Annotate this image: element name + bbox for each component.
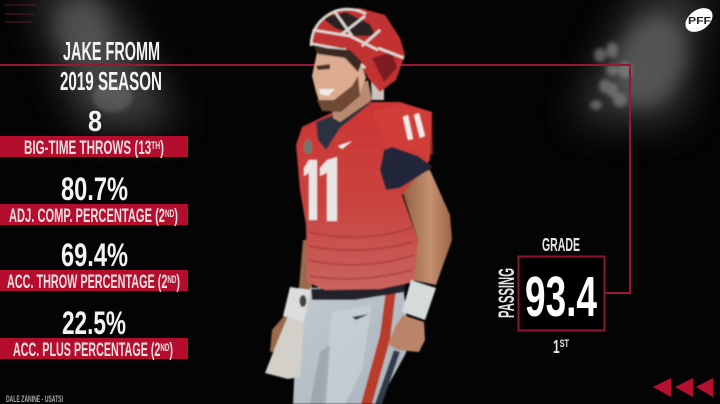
stat: adjusted completion percentage: 80.7% <box>61 171 128 207</box>
towel <box>265 316 304 379</box>
sleeve band <box>380 147 433 190</box>
beard <box>317 76 360 112</box>
sleeve logo <box>338 141 352 149</box>
helmet <box>312 8 405 92</box>
hair <box>314 47 362 72</box>
right arm <box>398 170 452 285</box>
stat: adjusted completion percentage <box>0 171 188 227</box>
PFF logo <box>681 3 717 37</box>
passing label: PASSING <box>494 268 519 318</box>
jersey <box>296 102 432 290</box>
stat: big-time throws: 8 <box>88 106 102 138</box>
stat: adjusted completion percentage: ) <box>174 206 178 227</box>
patch <box>304 140 312 154</box>
belt <box>311 284 405 300</box>
shoulder shading <box>372 104 433 155</box>
title: 2019 SEASON <box>60 66 162 96</box>
grade value: 93.4 <box>525 265 597 329</box>
left forearm <box>270 240 312 352</box>
stat: accuracy plus percentage: 22.5% <box>62 305 126 341</box>
stat: big-time throws: TH <box>151 140 160 152</box>
facemask <box>311 9 404 68</box>
jersey fold shadows <box>308 228 414 279</box>
title: JAKE FROMM <box>63 36 160 66</box>
stat: accurate throw percentage <box>0 237 188 293</box>
pants <box>293 284 408 404</box>
pants stripe <box>361 290 396 404</box>
face <box>312 48 366 112</box>
stat: accurate throw percentage: ) <box>176 272 180 293</box>
stat: accurate throw percentage: ND <box>167 274 176 286</box>
stat: adjusted completion percentage: ND <box>165 208 174 220</box>
left stadium spotlight <box>35 0 175 125</box>
rank: 1 <box>553 337 563 357</box>
stat: big-time throws: ) <box>160 138 164 159</box>
grade box <box>518 256 604 330</box>
jersey sleeve number <box>403 113 425 140</box>
stat: accuracy plus percentage: ND <box>160 342 169 354</box>
stat: accuracy plus percentage <box>0 305 188 361</box>
smile <box>319 89 335 96</box>
eye <box>316 64 330 70</box>
rank: ST <box>560 338 569 350</box>
top-left menu lines <box>5 5 36 22</box>
photo credit: DALE ZANINE - USATSI <box>6 394 63 404</box>
stat: adjusted completion percentage: ADJ. COMP. PERCENTAGE (2 <box>9 206 275 227</box>
stat: accuracy plus percentage: ) <box>169 340 173 361</box>
neck <box>332 80 372 122</box>
grade heading: GRADE <box>542 235 580 255</box>
stat: accurate throw percentage: 69.4% <box>61 237 128 273</box>
jersey front number <box>304 157 337 221</box>
PFF logo: PFF <box>688 16 711 27</box>
right hand <box>388 315 425 352</box>
right stadium spotlight <box>575 0 705 120</box>
stat: big-time throws <box>0 106 188 159</box>
left wristband <box>283 287 311 322</box>
chin strap <box>371 82 384 100</box>
right wristband <box>402 280 436 320</box>
collar <box>316 102 372 150</box>
connector line to grade box <box>0 65 630 293</box>
title <box>60 36 162 96</box>
pants logo <box>352 314 369 320</box>
stat: big-time throws: BIG-TIME THROWS (13 <box>24 138 232 159</box>
arrows <box>653 378 713 397</box>
player photo illustration <box>265 8 452 404</box>
helmet visor dark <box>322 12 376 36</box>
stat: accurate throw percentage: ACC. THROW PERCENTAGE (2 <box>7 272 288 293</box>
stat: accuracy plus percentage: ACC. PLUS PERCENTAGE (2 <box>13 340 273 361</box>
